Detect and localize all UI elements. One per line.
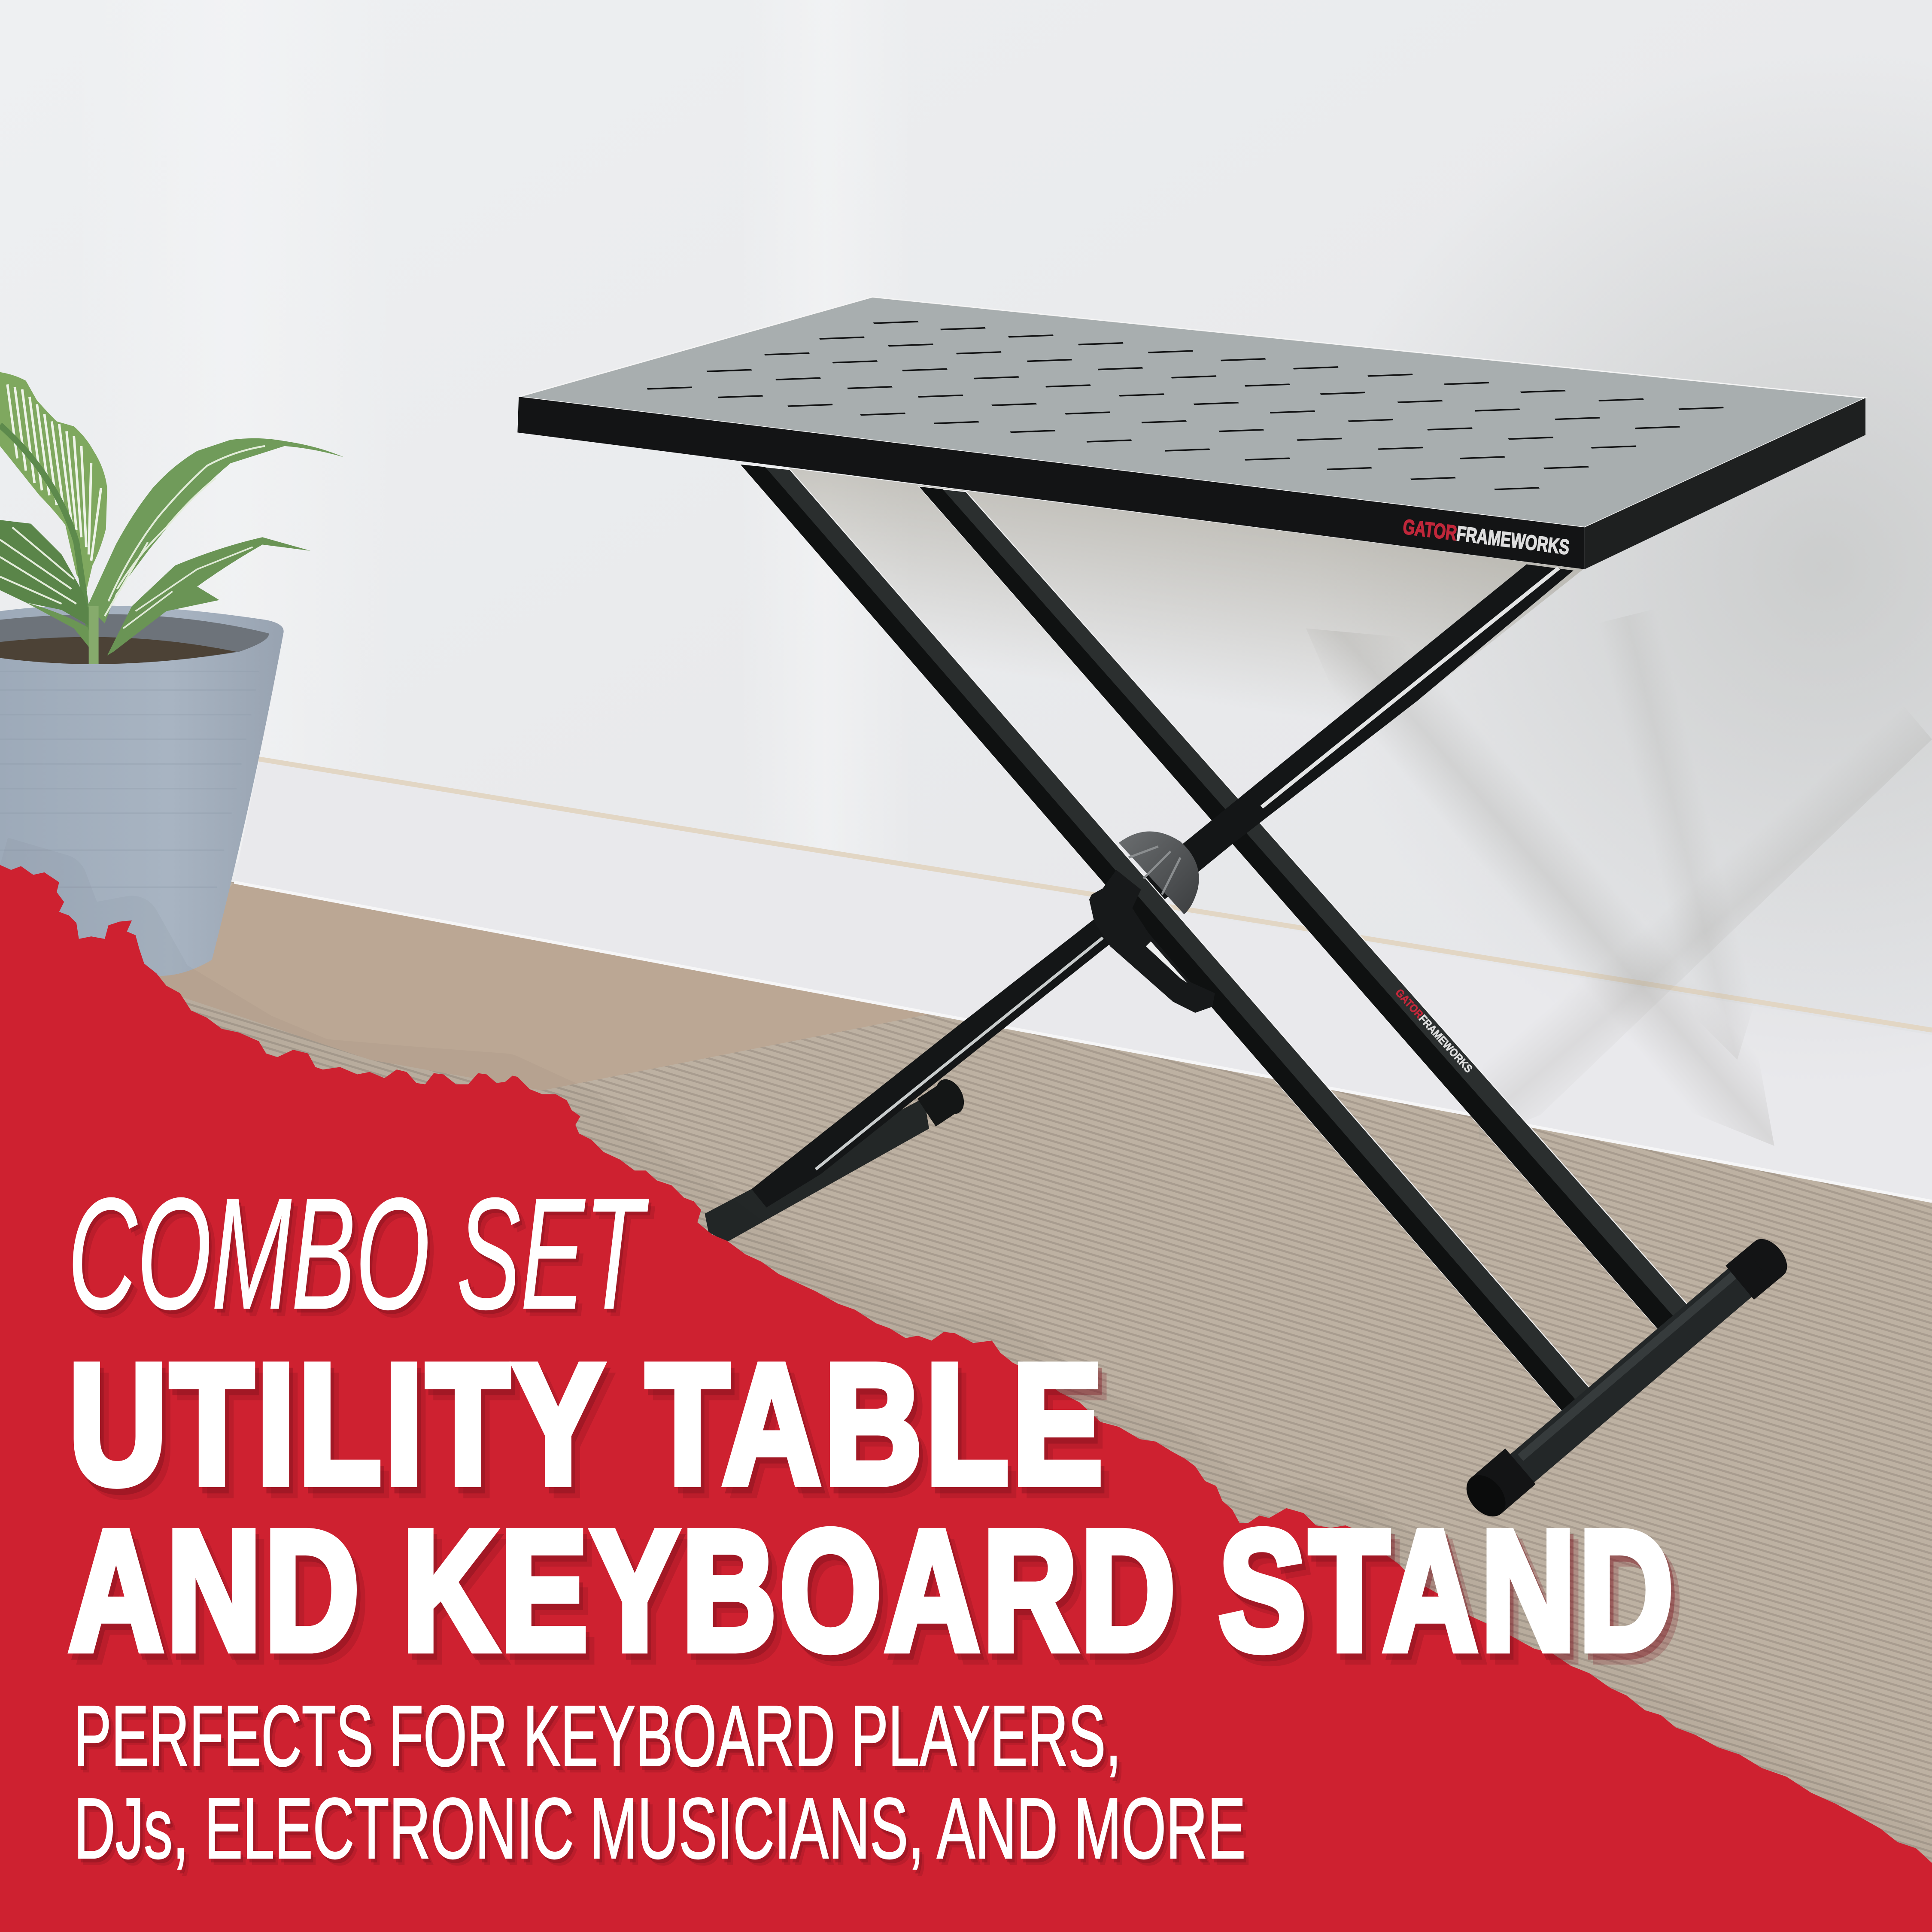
eyebrow: combo set: COMBO SET [68, 1165, 649, 1343]
table front edge [517, 397, 1585, 569]
wall shadow cast by table and stand [789, 468, 1932, 1146]
leg logo: GATORFRAMEWORKS [1393, 987, 1475, 1075]
subtitle line 2: DJs, ELECTRONIC MUSICIANS, AND MORE [74, 1780, 1245, 1877]
subtitle line 1: PERFECTS FOR KEYBOARD PLAYERS, [74, 1688, 1121, 1784]
torn edge shadow [0, 865, 1932, 1863]
height adjust lever [1089, 870, 1215, 1013]
plant pot [0, 605, 284, 976]
red torn paper panel [0, 865, 1932, 1932]
utility table and keyboard stand [517, 297, 1865, 1524]
table top panel [519, 297, 1865, 527]
knob [1119, 831, 1199, 914]
potted plant [0, 372, 344, 976]
plant leaves [0, 372, 344, 664]
front long leg [741, 465, 1596, 1417]
crossing leg, foot to table [752, 564, 1574, 1207]
front foot tube [1458, 1232, 1794, 1524]
table logo: GATORFRAMEWORKS [1402, 515, 1571, 559]
table side edge [1585, 398, 1865, 569]
rear foot tube [705, 1075, 969, 1242]
perforated slots [647, 322, 1723, 489]
headline shadows [70, 1169, 1686, 1883]
headline block [68, 1165, 1677, 1877]
rear long leg [919, 487, 1695, 1337]
